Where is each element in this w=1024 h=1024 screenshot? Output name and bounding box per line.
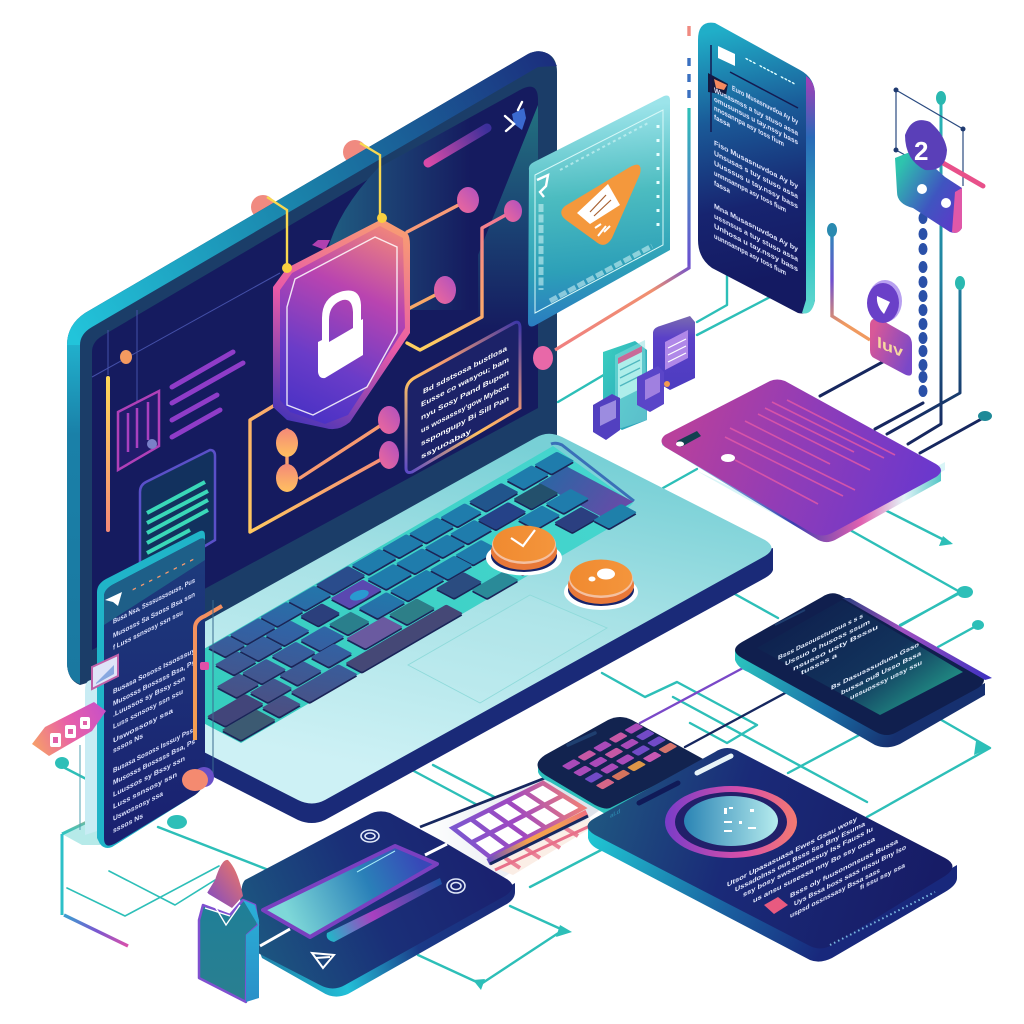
header dots: ▪ ▪ ▪ ▪ ▪ ▪ ▪ ▪ bbox=[132, 556, 194, 594]
phone body text: us ansu susessa nny Bo ssy ossa bbox=[753, 836, 875, 905]
bottom card device bbox=[240, 811, 515, 997]
phone body text: Uys Bssa boss sass nissu Bny Iso bbox=[794, 844, 906, 908]
card chip bbox=[677, 431, 701, 447]
text panel on screen bbox=[406, 322, 520, 472]
card lines bbox=[725, 400, 895, 504]
port dots bbox=[830, 892, 935, 945]
phone body text: fi ssu ssy ssa bbox=[860, 862, 905, 892]
left phone bbox=[32, 531, 222, 848]
text panel on screen: Bd sdstsosa bustlosa bbox=[423, 343, 508, 396]
left phone text: Luss ssnsosy ssn ssu bbox=[113, 687, 183, 731]
tall phone top right bbox=[698, 23, 815, 313]
phone body text: Utsor Upasasuasa Ewes Gsau wosy bbox=[727, 816, 857, 889]
purple list lines bbox=[172, 352, 243, 437]
tablet text: Ussuo o husoss ssum bbox=[785, 619, 870, 668]
glass card with warning icon bbox=[528, 96, 670, 326]
phone text: ussnsus a tuy stuso assa bbox=[714, 211, 799, 264]
phone body text bbox=[727, 816, 906, 920]
left phone text bbox=[113, 576, 196, 835]
phone body text: uspsd ossnssasy Bssa sass bbox=[790, 867, 880, 920]
left phone text: Busasa Sososs Isssuy Pss bbox=[113, 726, 193, 775]
orange node bbox=[120, 350, 132, 364]
phone text: fassa bbox=[714, 178, 731, 196]
tablet text: ussuosssy ussy ssu bbox=[850, 659, 922, 702]
phone body text: Ussadolnss ous Bsss 5ss Bny Esuma bbox=[735, 821, 865, 894]
laptop bbox=[67, 51, 773, 823]
tablet text: Bs Dasusssuduoa Gsso bbox=[831, 641, 919, 692]
left phone text: sssos Ns bbox=[113, 731, 143, 755]
left phone text: Musosss Bosssss Bsa, Ps bbox=[113, 737, 195, 787]
corner hook bbox=[537, 175, 548, 197]
big phone bottom right: al.d bbox=[610, 808, 620, 820]
card dot bbox=[721, 454, 735, 462]
red square bbox=[764, 897, 788, 914]
tablet text: tussss a bbox=[801, 652, 837, 677]
logo mark bbox=[505, 102, 526, 131]
circuit traces and nodes bbox=[250, 187, 522, 532]
big phone bottom right bbox=[588, 748, 957, 962]
trackpad bbox=[408, 595, 607, 703]
warning triangle bbox=[561, 165, 641, 245]
left phone text: Busasa Sososs Issosssuy bbox=[113, 645, 196, 696]
tablet text: bussa ou8 Usso Bssa bbox=[841, 650, 921, 697]
header pill bbox=[428, 128, 487, 163]
yellow wires bbox=[267, 143, 380, 267]
fingerprint icons bbox=[361, 830, 465, 893]
phone header icon: ••• ••••• •••• bbox=[745, 55, 796, 89]
left phone text: Luussos sy Bssy ssn bbox=[113, 753, 185, 799]
tablet upper right bbox=[735, 593, 992, 747]
laptop base bbox=[138, 434, 773, 823]
text panel on screen: ssyuoabay bbox=[421, 426, 472, 461]
left phone text: Busa Nsa, Ssssusssouss, Pus bbox=[113, 576, 195, 626]
text panel on screen: Eusse co wasyou; bam bbox=[421, 354, 509, 409]
phone header glyph bbox=[105, 592, 122, 606]
button: check bbox=[486, 526, 562, 576]
shield with lock bbox=[273, 213, 410, 429]
pink bumps behind screen bbox=[251, 140, 367, 219]
orange node on phone bbox=[182, 767, 214, 791]
purple card right bbox=[662, 380, 945, 542]
text panel on screen: us wosasssy'gow Mybost bbox=[421, 380, 509, 435]
phone text: Fiso Musasnuvdoa Ay by bbox=[714, 138, 799, 191]
phone body text: Bsss oly fuusononsuss Bussa bbox=[790, 838, 898, 900]
left phone text: Uswossosy ssa bbox=[113, 705, 174, 745]
phone text: omusunsus u tay.nssy bass bbox=[714, 94, 798, 147]
text panel on screen: nyu Sosy Pand Bupon bbox=[421, 367, 509, 422]
phone text bbox=[714, 83, 799, 277]
colored grid bbox=[420, 778, 600, 880]
phone text: fassa bbox=[714, 112, 731, 130]
triangle icon bbox=[312, 953, 334, 968]
calculator keys bbox=[562, 723, 677, 790]
keyboard keys bbox=[138, 448, 655, 743]
left phone text: Musosss Sa Ssoss Bsa ssn bbox=[113, 589, 195, 640]
tower bookmark icon bbox=[199, 860, 259, 1002]
numbered badge icon bbox=[894, 88, 983, 233]
phone header icon bbox=[708, 45, 798, 132]
person icon bbox=[827, 223, 912, 376]
green code box bbox=[140, 450, 215, 585]
phone text: uunnsannpa asy toss fium bbox=[714, 231, 786, 277]
barcode box bbox=[118, 391, 159, 470]
orange side bar bbox=[195, 606, 222, 740]
dashed link line with node bbox=[533, 26, 689, 370]
phone text: Unhosa u tay.nssy bass bbox=[714, 221, 798, 274]
button: dot bbox=[564, 560, 638, 610]
tablet text: Bsss Dasousstusoua s s s bbox=[778, 613, 863, 662]
phone text: Uusssus u tay.nssy bass bbox=[714, 158, 798, 211]
tablet text bbox=[778, 613, 922, 702]
phone pills bbox=[697, 756, 731, 773]
left phone text: Luss ssnsosy ssn bbox=[113, 770, 177, 811]
film strip border bbox=[541, 204, 652, 301]
lens ring bbox=[665, 786, 797, 858]
dotted column bbox=[918, 212, 928, 397]
calculator device bbox=[538, 717, 705, 815]
phone text: nnosannpa asy toss fium bbox=[714, 103, 784, 148]
left frame lines bbox=[55, 680, 187, 946]
slot pill bbox=[327, 878, 442, 942]
small image chip bbox=[92, 655, 118, 689]
white gap lines bbox=[260, 844, 447, 946]
phone text: Euro Musasnuvdoa Ay by bbox=[732, 83, 799, 127]
phone body text: ssy bosy swssoomssuy Iss Fauss Iu bbox=[743, 826, 873, 899]
document stack icons bbox=[593, 316, 695, 440]
right connector lines with dots bbox=[820, 91, 992, 453]
left phone text: sssos Ns bbox=[113, 811, 143, 835]
yellow bar bbox=[106, 378, 110, 530]
person icon: luv bbox=[877, 334, 903, 361]
left phone text: Uswossosy ssa bbox=[113, 789, 164, 823]
phone text: Unsusas s tuy stuso assa bbox=[714, 148, 799, 201]
phone text: Mna Musasnuvdoa Ay by bbox=[714, 201, 799, 254]
keyboard well bbox=[190, 446, 633, 743]
phone text: Wusasmss a tuy stuso assa bbox=[714, 85, 799, 138]
coloured key overlays bbox=[140, 458, 637, 741]
text panel on screen: sspongupy Bi Sill Pan bbox=[421, 393, 510, 448]
laptop screen bbox=[67, 51, 557, 685]
thin guide lines bbox=[92, 273, 280, 420]
tablet text: nsusso usty Bsssu bbox=[793, 624, 878, 673]
phone text: unnnsannpa asy toss fium bbox=[714, 168, 786, 214]
numbered badge icon: 2 bbox=[914, 136, 928, 166]
background connector lines bbox=[65, 270, 990, 990]
left phone text: Musosss Bosssss Bsa, Ps bbox=[113, 658, 195, 708]
hex tag bbox=[32, 702, 106, 756]
screen inset bbox=[263, 846, 437, 937]
left phone text: .Luussos sy Bssy ssn bbox=[113, 673, 185, 719]
left phone text: f Luss ssnsosy ssn ssu bbox=[113, 608, 183, 652]
padlock bbox=[318, 291, 363, 378]
